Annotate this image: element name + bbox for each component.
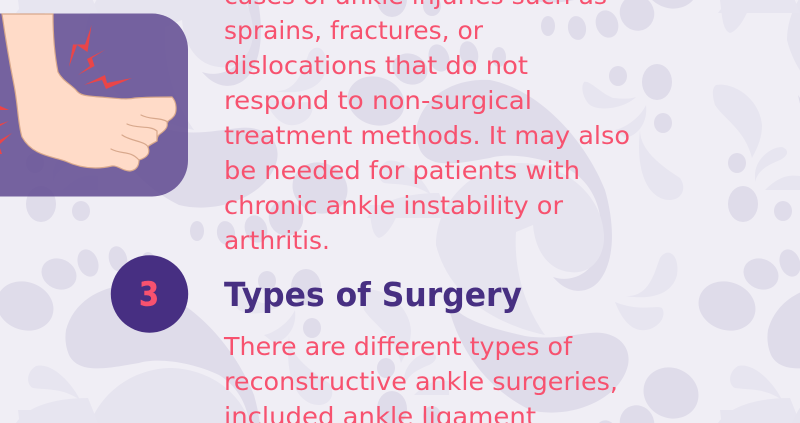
body text: section 2 [224, 0, 630, 255]
body text: section 2: sprains, fractures, or [224, 16, 484, 45]
toe lines [111, 115, 168, 160]
body text: section 3: There are different types of [223, 332, 573, 361]
number badge 3: 3 [139, 274, 159, 314]
body text: section 2: dislocations that do not [224, 51, 528, 80]
body text: section 2: chronic ankle instability or [224, 191, 564, 220]
body text: section 2: be needed for patients with [224, 156, 580, 185]
icon: pain bolts [0, 25, 132, 154]
icon: foot [2, 14, 176, 171]
body text: section 2: respond to non-surgical [224, 86, 532, 115]
body text: section 2: treatment methods. It may also [224, 121, 630, 150]
body text: section 3: reconstructive ankle surgeries, [224, 367, 618, 396]
panel: ankle illustration [0, 14, 188, 196]
body text: section 2: arthritis. [224, 226, 330, 255]
panel background [0, 14, 188, 196]
heading: types of surgery: Types of Surgery [224, 275, 522, 314]
body text: section 3 [223, 332, 618, 423]
number badge 3 [111, 255, 188, 333]
